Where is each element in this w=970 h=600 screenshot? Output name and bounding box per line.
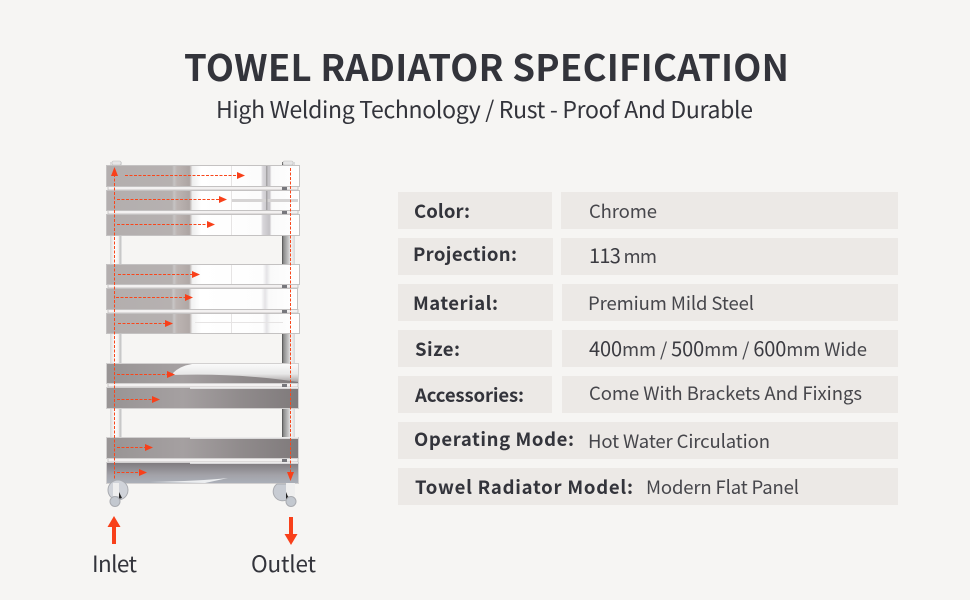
row: towel radiator model: Modern Flat Panel: [646, 474, 799, 500]
row: color: [398, 192, 898, 229]
inlet label: Inlet: [92, 547, 138, 579]
caster wheels: [108, 480, 296, 506]
spec table: [398, 192, 898, 505]
lower chrome panels: [106, 364, 298, 484]
row: operating mode: Hot Water Circulation: [588, 428, 770, 454]
outlet arrow: [284, 517, 298, 545]
row: accessories: [398, 376, 898, 413]
vertical rails: [110, 162, 295, 484]
row: material: Premium Mild Steel: [588, 290, 754, 316]
row: color: Color:: [414, 198, 470, 224]
row: accessories: Come With Brackets And Fixings: [589, 380, 862, 406]
row: operating mode: Operating Mode:: [414, 426, 574, 452]
dark fixing blocks: [282, 187, 287, 462]
window reflections: [195, 166, 298, 333]
connecting bars between panels: [108, 186, 298, 462]
top mounting knobs: [112, 161, 293, 165]
upper chrome panels: [106, 166, 300, 334]
title: TOWEL RADIATOR SPECIFICATION: [184, 39, 789, 92]
subtitle: High Welding Technology / Rust - Proof And Durable: [216, 91, 753, 125]
outlet label: Outlet: [251, 547, 317, 579]
row: towel radiator model: [398, 468, 898, 505]
row: size: [398, 330, 898, 367]
row: projection: [398, 238, 898, 275]
flow arrows inside radiator: [111, 167, 294, 481]
row: projection: Projection:: [413, 241, 517, 267]
row: material: Material:: [413, 290, 498, 316]
inlet arrow: [108, 516, 120, 544]
row: size: 400mm / 500mm / 600mm Wide: [589, 333, 867, 362]
row: towel radiator model: Towel Radiator Model:: [415, 474, 633, 500]
row: color: Chrome: [589, 198, 657, 224]
row: material: [398, 284, 898, 321]
radiator illustration: [106, 161, 300, 506]
row: projection: 113 mm: [589, 240, 657, 269]
row: operating mode: [398, 422, 898, 459]
row: size: Size:: [415, 336, 460, 362]
row: accessories: Accessories:: [414, 382, 524, 408]
